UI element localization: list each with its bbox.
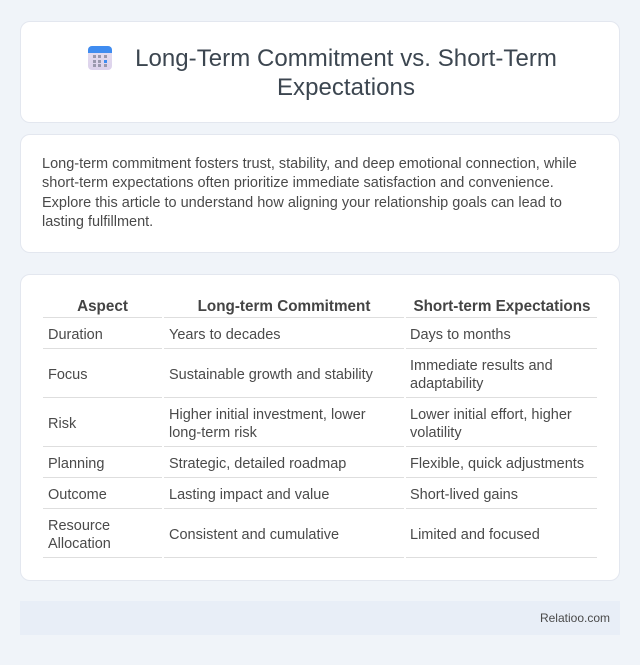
row: planning [43, 456, 597, 478]
header row: Long-term Commitment [198, 298, 370, 315]
panel: introduction [20, 134, 620, 253]
footer text: Relatioo.com [540, 611, 610, 625]
row: resource allocation: Resource [48, 518, 110, 534]
intro text [42, 156, 577, 230]
panel: comparison table [20, 274, 620, 581]
row: risk: Higher initial investment, lower [169, 407, 366, 423]
row: risk: volatility [410, 425, 462, 441]
footer [20, 601, 620, 635]
icon: calendar [88, 46, 112, 70]
header row: Aspect [77, 298, 128, 315]
row: focus: adaptability [410, 376, 483, 392]
row: duration: Days to months [410, 327, 511, 343]
title text [135, 45, 557, 101]
row: planning: Strategic, detailed roadmap [169, 456, 346, 472]
intro text: lasting fulfillment. [42, 214, 153, 230]
panel: title [20, 21, 620, 123]
row: risk: Risk [48, 416, 76, 432]
row: planning: Flexible, quick adjustments [410, 456, 584, 472]
row: outcome [43, 487, 597, 509]
row: risk [43, 407, 597, 447]
row: resource allocation: Allocation [48, 536, 111, 552]
row: duration: Duration [48, 327, 103, 343]
intro text: Explore this article to understand how aligning your relationship goals can lead to [42, 195, 562, 211]
row: risk: Lower initial effort, higher [410, 407, 572, 423]
row: duration: Years to decades [169, 327, 281, 343]
intro text: short-term expectations often prioritize immediate satisfaction and convenience. [42, 175, 554, 191]
row: focus: Sustainable growth and stability [169, 367, 373, 383]
header row [43, 298, 597, 318]
title text: Long-Term Commitment vs. Short-Term [135, 45, 557, 72]
row: focus [43, 358, 597, 398]
row: outcome: Outcome [48, 487, 107, 503]
title text: Expectations [277, 74, 415, 101]
row: risk: long-term risk [169, 425, 257, 441]
intro text: Long-term commitment fosters trust, stability, and deep emotional connection, while [42, 156, 577, 172]
row: resource allocation [43, 518, 597, 558]
row: focus: Immediate results and [410, 358, 553, 374]
row: outcome: Short-lived gains [410, 487, 518, 503]
table [43, 298, 597, 558]
row: planning: Planning [48, 456, 104, 472]
header row: Short-term Expectations [413, 298, 591, 315]
row: duration [43, 327, 597, 349]
row: resource allocation: Limited and focused [410, 527, 540, 543]
row: resource allocation: Consistent and cumulative [169, 527, 339, 543]
row: outcome: Lasting impact and value [169, 487, 329, 503]
row: focus: Focus [48, 367, 88, 383]
